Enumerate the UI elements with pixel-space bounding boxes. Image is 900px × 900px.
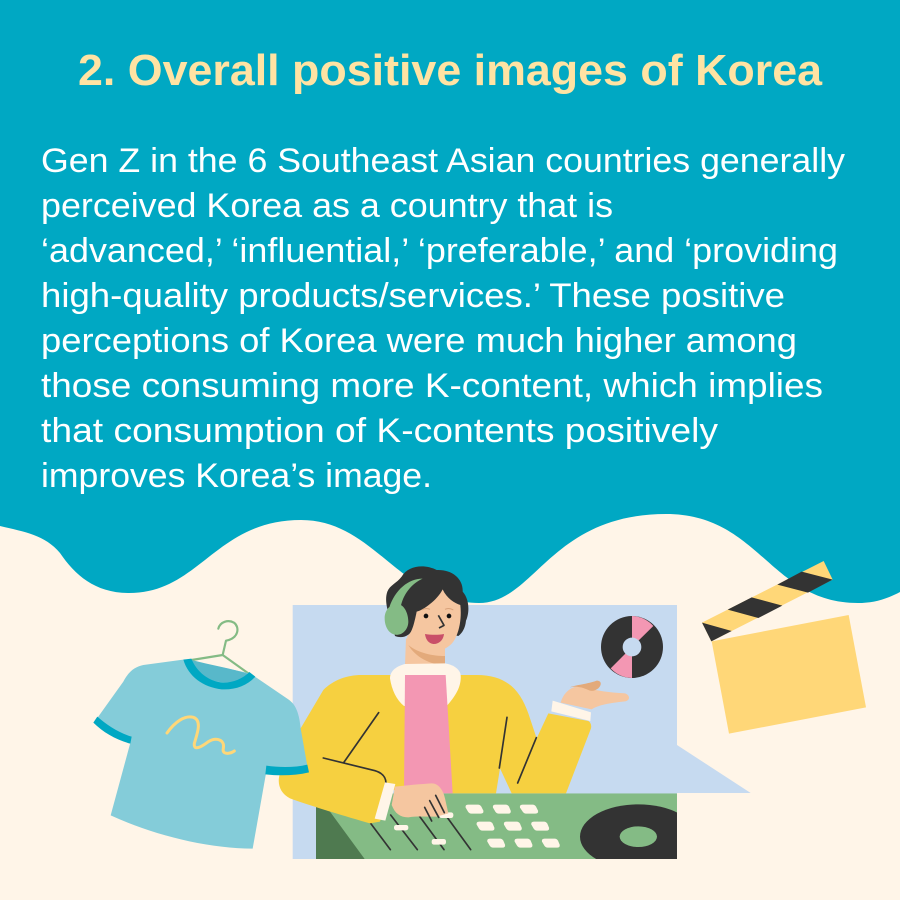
body text block: perceived Korea as a country that is xyxy=(41,187,613,225)
body text block: ‘advanced,’ ‘influential,’ ‘preferable,’ and ‘providing xyxy=(41,232,838,270)
person: pink shirt xyxy=(404,675,453,793)
body text block: high-quality products/services.’ These positive xyxy=(41,277,785,315)
person: raised hand xyxy=(561,681,629,709)
speech bubble panel xyxy=(293,605,751,859)
icon: t-shirt on hanger xyxy=(93,621,309,849)
body text block: those consuming more K-content, which implies xyxy=(41,367,823,405)
teal wave background xyxy=(0,0,900,603)
person: neck xyxy=(405,638,445,665)
person: back hair xyxy=(386,566,468,637)
person: face xyxy=(407,589,461,652)
clapper board xyxy=(712,615,866,734)
person: headphones xyxy=(385,579,423,635)
person: facial features xyxy=(422,608,453,644)
person: hand on console xyxy=(392,783,448,821)
person: jacket xyxy=(279,675,591,823)
mixing console xyxy=(316,793,677,859)
hanger xyxy=(192,621,248,673)
person: jacket lines xyxy=(323,713,536,783)
collar inside xyxy=(192,660,248,682)
vinyl disc icon xyxy=(601,616,663,678)
shirt body xyxy=(94,659,308,849)
clapper stripes xyxy=(702,572,833,641)
clapper arm xyxy=(702,561,833,641)
person: cuffs xyxy=(375,701,591,821)
title: 2. Overall positive images of Korea xyxy=(78,46,823,95)
illustration: DJ with mixing console xyxy=(279,566,697,869)
body text block: perceptions of Korea were much higher among xyxy=(41,322,797,360)
collar and sleeve trim xyxy=(93,659,309,775)
body text block: Gen Z in the 6 Southeast Asian countries generally xyxy=(41,142,845,180)
body text block: improves Korea’s image. xyxy=(41,457,432,495)
body text block xyxy=(41,142,845,495)
person: collar xyxy=(390,663,461,706)
body text block: that consumption of K-contents positively xyxy=(41,412,718,450)
icon: film clapperboard xyxy=(702,561,866,734)
scribble xyxy=(167,717,234,753)
person: neck shadow xyxy=(408,645,445,665)
